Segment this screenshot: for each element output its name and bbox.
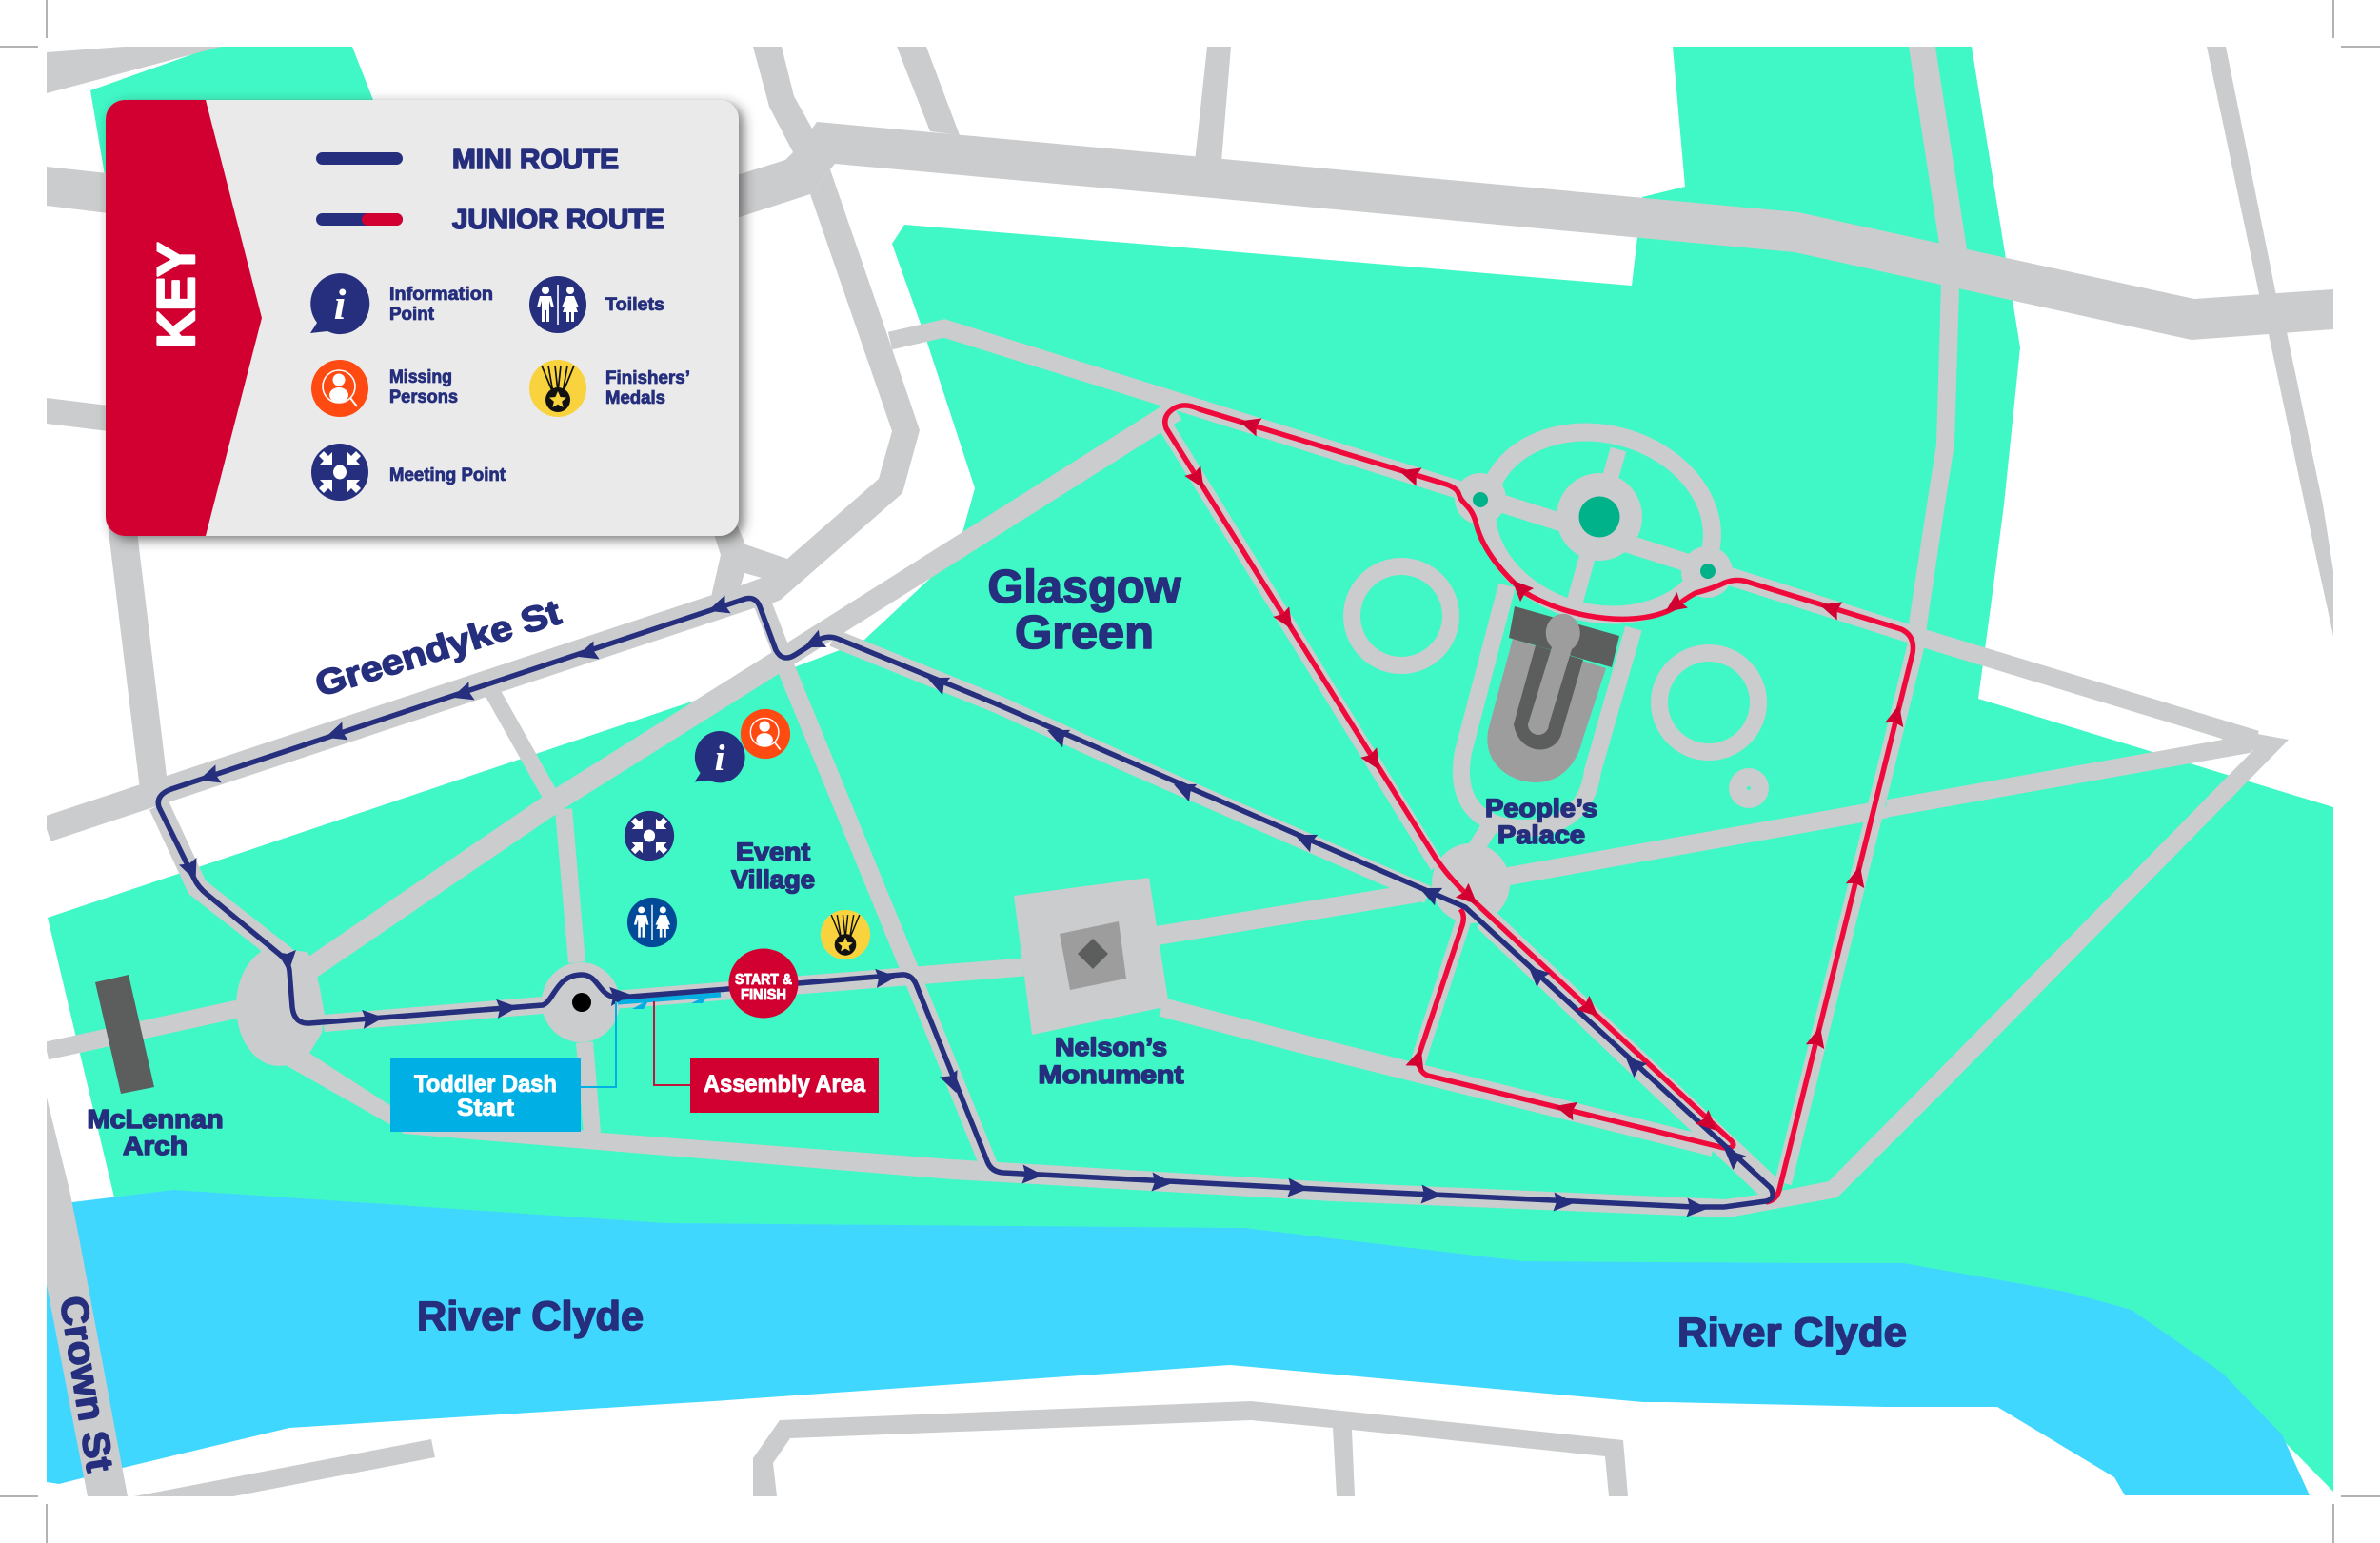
label: Greendyke St: Greendyke St: [310, 592, 565, 704]
label: River Clyde east: River Clyde: [1677, 1310, 1907, 1355]
label: Event Village: [731, 838, 815, 894]
legend label: missing persons: Persons: [389, 387, 458, 407]
label: Glasgow Green: Green: [1015, 607, 1154, 659]
legend icon: missing persons: [311, 360, 368, 417]
label: People's Palace: People’s: [1485, 794, 1597, 822]
legend label: missing persons: [389, 367, 458, 407]
label: McLennan Arch: [88, 1109, 223, 1156]
legend label: junior route: JUNIOR ROUTE: [452, 205, 664, 235]
park: top-left green area: [90, 47, 373, 173]
legend icon: finishers' medals: [529, 360, 586, 417]
callout: Toddler Dash Start: Start: [457, 1095, 515, 1121]
legend label: finishers' medals: [605, 368, 690, 408]
People's Palace building: [1487, 606, 1619, 782]
label: Crown St: Crown St: [51, 1294, 121, 1474]
label: People's Palace: Palace: [1497, 821, 1585, 849]
legend icon: meeting point: [311, 444, 368, 501]
map icon: missing persons: [741, 709, 790, 759]
label: Nelson's Monument: Monument: [1038, 1060, 1184, 1089]
junior route: red line: [1165, 406, 1914, 1202]
label: McLennan Arch: McLennan: [88, 1104, 223, 1134]
River Clyde water: [47, 1190, 2310, 1495]
label: Event Village: Village: [731, 865, 815, 894]
callout: Toddler Dash Start: Toddler Dash: [414, 1071, 557, 1098]
mini route: blue line: [158, 599, 1773, 1207]
label: Glasgow Green: [988, 567, 1182, 649]
legend label: finishers' medals: Finishers’: [605, 368, 690, 388]
legend label: information point: [389, 285, 493, 325]
callout: Assembly Area: [690, 1058, 879, 1113]
McLennan Arch building: [95, 975, 154, 1094]
direction arrows: junior route: [1184, 412, 1909, 1137]
legend title: KEY: KEY: [146, 242, 206, 348]
label: People's Palace: [1486, 798, 1597, 844]
map icon: information point: [695, 731, 745, 782]
roundabout centre dot: [572, 993, 591, 1012]
legend label: meeting point: Meeting Point: [389, 465, 506, 485]
legend label: toilets: Toilets: [605, 295, 664, 315]
legend label: information point: Point: [389, 305, 435, 325]
legend label: mini route: MINI ROUTE: [452, 145, 619, 175]
legend label: information point: Information: [389, 285, 493, 305]
legend panel: key: [106, 100, 739, 536]
Toddler Dash start section: [618, 995, 721, 1009]
label: Nelson's Monument: [1040, 1036, 1184, 1084]
label: Nelson's Monument: Nelson’s: [1055, 1033, 1167, 1061]
marker: Start and Finish: [729, 948, 798, 1019]
map icon: finishers' medals: [821, 910, 870, 959]
legend swatch: junior route: [316, 213, 403, 226]
map icon: meeting point: [625, 811, 674, 861]
label: McLennan Arch: Arch: [123, 1131, 188, 1160]
direction arrows: mini route: [179, 595, 1746, 1218]
legend label: missing persons: Missing: [389, 367, 452, 387]
legend label: finishers' medals: Medals: [605, 388, 665, 408]
label: Event Village: Event: [736, 838, 810, 866]
legend icon: toilets: [529, 276, 586, 333]
label: River Clyde west: River Clyde: [417, 1294, 644, 1339]
legend swatch: mini route: [316, 152, 403, 165]
legend icon: information point: [310, 273, 369, 334]
map icon: toilets: [627, 898, 677, 947]
label: Glasgow Green: Glasgow: [988, 562, 1181, 613]
ring paths around People's Palace: [1352, 407, 1769, 852]
callout connector lines: [581, 1001, 690, 1087]
marker: Start and Finish: START &: [735, 972, 792, 988]
legend red banner: [106, 100, 262, 536]
marker: Start and Finish: FINISH: [741, 987, 786, 1003]
Nelson's Monument plinth: [1014, 878, 1169, 1035]
callout: Assembly Area: Assembly Area: [704, 1071, 866, 1098]
callout: Toddler Dash Start: [390, 1058, 581, 1132]
